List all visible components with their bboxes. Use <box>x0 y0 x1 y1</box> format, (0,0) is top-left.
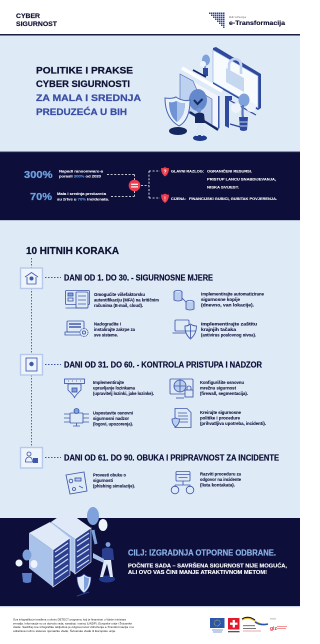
panel: goal band <box>0 518 300 606</box>
item: MFA: autentifikaciju (MFA) na kritičnim <box>94 298 159 302</box>
hero title: PREDUZEĆA U BIH <box>36 106 127 118</box>
icon: warning shield 2: ! <box>164 196 166 202</box>
illustration: servers <box>16 507 115 596</box>
item: patches: instalirajte zakrpe za <box>94 327 135 332</box>
reason text <box>171 168 276 190</box>
logo: Switzerland <box>228 618 240 632</box>
stat: 70%: su žrtve u 70% incidenata. <box>57 198 109 202</box>
footer disclaimer: Ova infografika je izrađena u okviru DETECT programa, koji je finansiran u Vijeće ministara <box>13 618 127 622</box>
cost text: FINANCIJSKI GUBICI, GUBITAK POVJERENJA. <box>189 197 277 201</box>
panel: hero background <box>0 36 300 519</box>
icon: training <box>20 448 42 468</box>
person <box>190 108 218 141</box>
item: backups: sigurnosne kopije <box>201 297 240 302</box>
item: incident plan <box>171 472 241 494</box>
hero title: POLITIKE I PRAKSE <box>36 66 134 76</box>
footer disclaimer: zemalja. Informacije su uz dozvolu rada, saradnju i razvoj (UNDP). Europske unije i Švicarske <box>13 620 133 625</box>
logo: e-Transformacija: e-Transformacija <box>229 21 286 27</box>
hero title <box>36 66 141 118</box>
item: monitoring: Uspostavite osnovni <box>93 410 133 416</box>
item: backups <box>174 290 264 310</box>
plant behind <box>87 507 108 544</box>
item: incident plan: Razviti proceduru za <box>200 472 241 476</box>
item: patches: Nadogradite i <box>94 322 121 326</box>
item: policy: politike i procedure <box>200 416 240 420</box>
header title: CYBER <box>16 13 40 20</box>
item: monitoring <box>64 408 133 426</box>
reason text: PRISTUP LANCU SNABDIJEVANJA, <box>207 178 276 182</box>
stat: 70%: Mala i srednja preduzeća <box>57 192 107 196</box>
panel: statistics band <box>0 152 300 221</box>
heading: DANI OD 61. DO 90. OBUKA I PRIPRAVNOST ZA INCIDENTE <box>64 454 280 462</box>
item: patches: sve sisteme. <box>94 332 118 338</box>
heading: DANI OD 31. DO 60. - KONTROLA PRISTUPA I NADZOR <box>64 360 262 370</box>
icon: equals circle <box>129 180 140 191</box>
item: network <box>170 379 248 398</box>
item: passwords: (upravitelj lozinki, jake lozinke). <box>93 391 154 396</box>
item: policy: Kreirajte sigurnosne <box>200 410 241 415</box>
heading: DANI OD 1. DO 30. - SIGURNOSNE MJERE <box>64 274 214 282</box>
item: network: mrežnu sigurnost <box>200 386 236 390</box>
step 2 <box>20 354 266 428</box>
hero title: CYBER SIGURNOSTI <box>36 79 130 90</box>
cost text: CIJENA: <box>171 197 186 201</box>
logo: GIZ: giz <box>270 626 277 632</box>
icon: warning shield <box>161 167 169 176</box>
item: policy <box>172 408 266 428</box>
item: backups: (dnevno, van lokacije). <box>201 302 254 308</box>
item: network: (firewall, segmentacija). <box>200 391 248 396</box>
stat: 70%: 70% <box>30 191 53 203</box>
plant left <box>16 550 38 583</box>
step 3 <box>20 448 280 494</box>
logos <box>210 617 287 632</box>
icon: access <box>20 354 42 375</box>
item: training board: sigurnosti <box>93 478 113 483</box>
item: incident plan: (lista kontakata). <box>200 482 235 488</box>
logo: e-Transformacija <box>209 12 286 28</box>
logo: e-Transformacija: Udruženje <box>229 15 246 19</box>
step 1 <box>20 268 264 339</box>
stat: 300%: 300% <box>24 169 53 181</box>
item: MFA <box>66 290 159 308</box>
plant right <box>231 94 256 131</box>
item: monitoring: sigurnosni nadzor <box>93 416 129 421</box>
footer disclaimer: vlade. Sadržaj ove infografike isključiva je odgovornost Udruženja e-Transformacija i ne <box>13 625 135 629</box>
reason text: OGRANIČENI RESURSI. <box>207 168 252 174</box>
logo: Germany <box>242 617 268 632</box>
item: MFA: Omogućite višefaktorsku <box>94 292 145 297</box>
item: endpoints: krajnjih tačaka <box>201 327 236 332</box>
icon: warning shield: ? <box>163 170 167 176</box>
server left <box>29 522 70 587</box>
item: MFA: računima (E-mail, cloud). <box>94 303 143 308</box>
item: endpoints: (antivirus poslovnog nivoa). <box>201 332 256 338</box>
header title: SIGURNOST <box>16 21 57 28</box>
item: policy: (prihvatljiva upotreba, incidenti). <box>200 421 266 426</box>
hero title: ZA MALA I SREDNJA <box>36 93 141 104</box>
item: backups: Implementirajte automatizirane <box>201 292 264 296</box>
item: passwords: upravljanje lozinkama <box>93 386 135 390</box>
monitor with lock <box>213 47 261 128</box>
stat: 300% <box>24 169 104 181</box>
heading: 10 steps: 10 HITNIH KORAKA <box>26 245 119 257</box>
icon: home shield <box>20 268 42 288</box>
footer disclaimer <box>13 618 135 633</box>
header <box>16 12 286 28</box>
timeline line <box>30 258 32 447</box>
item: monitoring: (logovi, upozorenja). <box>93 422 133 426</box>
goal text: CILJ: IZGRADNJA OTPORNE ODBRANE. <box>128 548 276 558</box>
reason text: NISKA SVIJEST. <box>207 186 239 190</box>
goal text <box>128 548 287 576</box>
icon: warning shield 2 <box>161 194 169 203</box>
item: incident plan: odgovor na incidente <box>200 477 241 482</box>
person with laptop <box>93 542 115 582</box>
folder panel <box>180 74 220 130</box>
item: patches <box>65 321 135 338</box>
item: network: Konfigurišite osnovnu <box>200 380 244 385</box>
item: training board <box>66 472 135 494</box>
item: endpoints <box>172 320 257 339</box>
goal text: ALI OVO VAS ČINI MANJE ATRAKTIVNOM METOM! <box>128 569 267 576</box>
shield <box>165 97 190 135</box>
item: passwords: Implementirajte <box>93 380 124 385</box>
server right <box>51 511 91 574</box>
small plant top <box>200 54 210 76</box>
footer disclaimer: odražava nužno stavove njemačke vlade, Švicarske vlade ili Europske unije. <box>13 628 116 633</box>
stat: 300%: porasli 300% od 2020 <box>59 175 101 179</box>
item: training board: (phishing simulacije). <box>93 484 135 488</box>
small shield <box>77 574 91 596</box>
hero illustration: security <box>165 47 261 141</box>
stripes behind panel <box>193 70 206 77</box>
logo: EU <box>210 618 224 632</box>
item: endpoints: Implementirajte zaštitu <box>201 322 257 326</box>
item: training board: Provesti obuku o <box>93 472 126 478</box>
header title <box>16 13 57 28</box>
stat: 70% <box>30 191 109 203</box>
reason text: GLAVNI RAZLOG: <box>171 170 204 174</box>
stat: 300%: Napadi ransomware-a <box>59 170 104 174</box>
goal text: POČNITE SADA – SAVRŠENA SIGURNOST NIJE MOGUĆA, <box>128 561 287 569</box>
item: passwords <box>64 379 154 398</box>
